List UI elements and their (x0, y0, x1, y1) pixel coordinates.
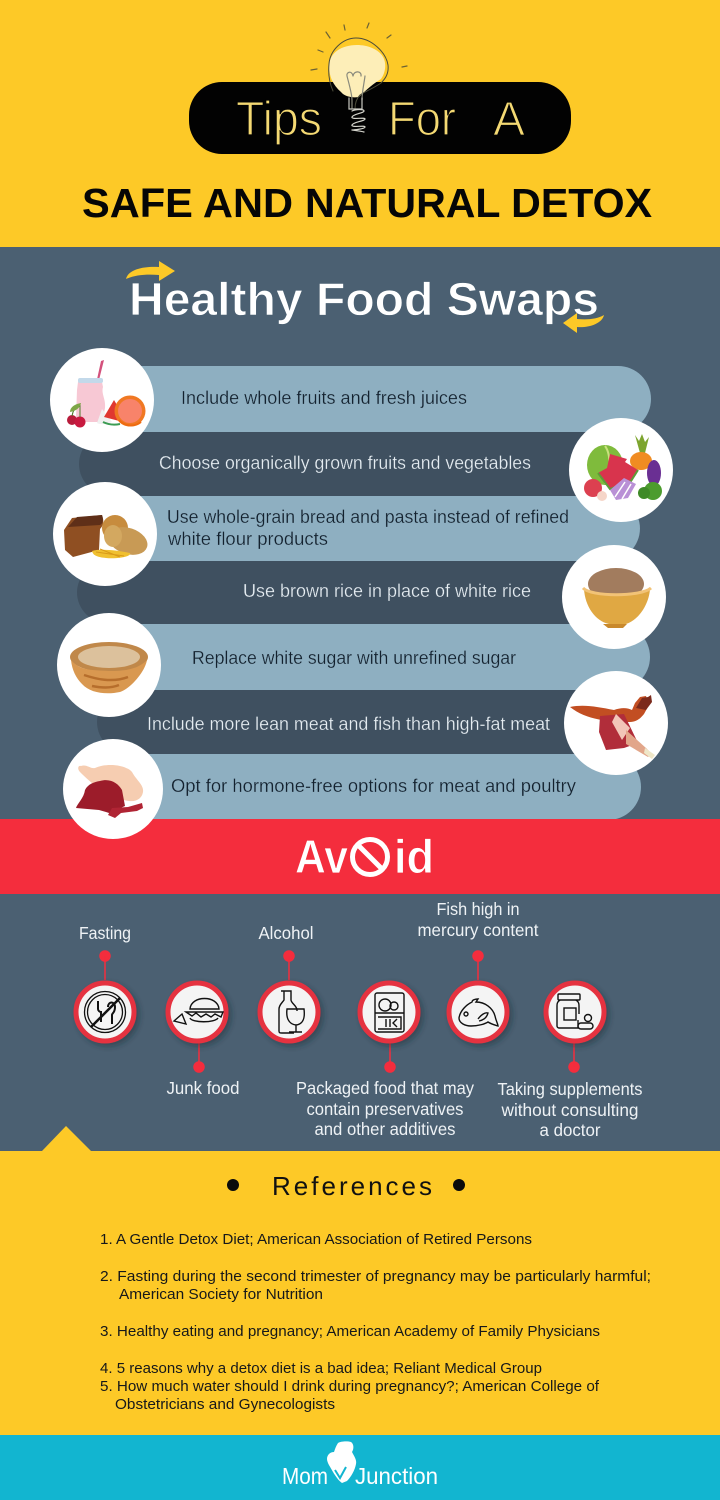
icon: bread and pasta (53, 482, 157, 586)
avoid labels: without consulting (501, 1100, 638, 1120)
avoid labels (79, 899, 643, 1140)
panel: avoid list (0, 894, 720, 1151)
swap item texts: Choose organically grown fruits and vegetables (159, 452, 531, 473)
references heading: References (272, 1171, 432, 1201)
avoid labels: Packaged food that may (296, 1078, 474, 1098)
swap item texts: Use brown rice in place of white rice (243, 580, 531, 601)
icon: poultry and red meat (63, 739, 163, 839)
title pill (189, 82, 571, 154)
swap item texts: Opt for hormone-free options for meat and poultry (171, 775, 577, 796)
reference list: 2. Fasting during the second trimester of pregnancy may be particularly harmful; (100, 1268, 651, 1285)
title text: Tips For A: Tips (236, 93, 322, 146)
avoid labels: Junk food (166, 1078, 240, 1098)
icon: packaged food (360, 983, 418, 1041)
swap item texts: white flour products (167, 528, 328, 549)
logo: MomJunction: Junction (355, 1463, 438, 1489)
panel: avoid banner (0, 819, 720, 894)
reference list: 3. Healthy eating and pregnancy; American Academy of Family Physicians (100, 1323, 600, 1340)
connectors (100, 951, 579, 1072)
swap item texts: Use whole-grain bread and pasta instead of refined (167, 506, 569, 527)
avoid heading: id (394, 830, 434, 883)
avoid labels: Fish high in (436, 899, 520, 919)
reference list: 4. 5 reasons why a detox diet is a bad idea; Reliant Medical Group (100, 1360, 542, 1377)
avoid heading (295, 830, 434, 883)
icon: unrefined sugar bowl (57, 613, 161, 717)
title text: Tips For A: For (388, 93, 456, 146)
icon: supplements (546, 983, 604, 1041)
icon: light bulb (311, 23, 407, 132)
icon: brown rice bowl (562, 545, 666, 649)
avoid heading: Av (295, 830, 348, 883)
subtitle (82, 180, 652, 226)
title text: Tips For A: A (493, 93, 525, 146)
logo: MomJunction (282, 1441, 438, 1489)
title text: Tips For A (236, 93, 525, 146)
avoid labels: Fasting (79, 923, 131, 943)
avoid labels: a doctor (540, 1120, 601, 1140)
icon: no fasting (76, 983, 134, 1041)
subtitle: NATURAL DETOX (305, 180, 652, 226)
icon: fish (449, 983, 507, 1041)
icon: burger and pizza (168, 983, 226, 1041)
swap item texts (147, 387, 577, 796)
swap item texts: Replace white sugar with unrefined sugar (192, 647, 516, 668)
avoid labels: and other additives (314, 1119, 456, 1139)
reference list: Obstetricians and Gynecologists (115, 1396, 335, 1413)
subtitle: SAFE AND (82, 180, 293, 226)
panel: healthy food swaps (0, 247, 720, 820)
avoid labels: Alcohol (258, 923, 314, 943)
panel: header (82, 23, 652, 226)
icon: lean meat and fish (564, 671, 668, 775)
reference list: 5. How much water should I drink during pregnancy?; American College of (100, 1378, 600, 1395)
icon: swap arrow right (126, 261, 175, 281)
heading: Healthy Food Swaps (129, 273, 599, 325)
references heading (227, 1171, 465, 1201)
icon: fruits and vegetables (569, 418, 673, 522)
avoid labels: contain preservatives (306, 1099, 464, 1119)
avoid labels: Taking supplements (498, 1079, 643, 1099)
icon: swap arrow left (563, 313, 604, 333)
avoid labels: mercury content (418, 920, 539, 940)
swap item texts: Include more lean meat and fish than high-fat meat (147, 713, 550, 734)
logo: MomJunction: Mom (282, 1463, 328, 1489)
panel: references (0, 1126, 720, 1435)
swap bars (77, 366, 651, 820)
swap item texts: Include whole fruits and fresh juices (181, 387, 467, 408)
panel: footer (0, 1435, 720, 1500)
food circles (50, 348, 673, 839)
reference list: 1. A Gentle Detox Diet; American Association of Retired Persons (100, 1231, 532, 1248)
icon: wine bottle and glass (260, 983, 318, 1041)
reference list: American Society for Nutrition (119, 1286, 323, 1303)
reference list (100, 1231, 651, 1413)
icon: smoothie and fruit (50, 348, 154, 452)
decorative tab (42, 1126, 91, 1151)
